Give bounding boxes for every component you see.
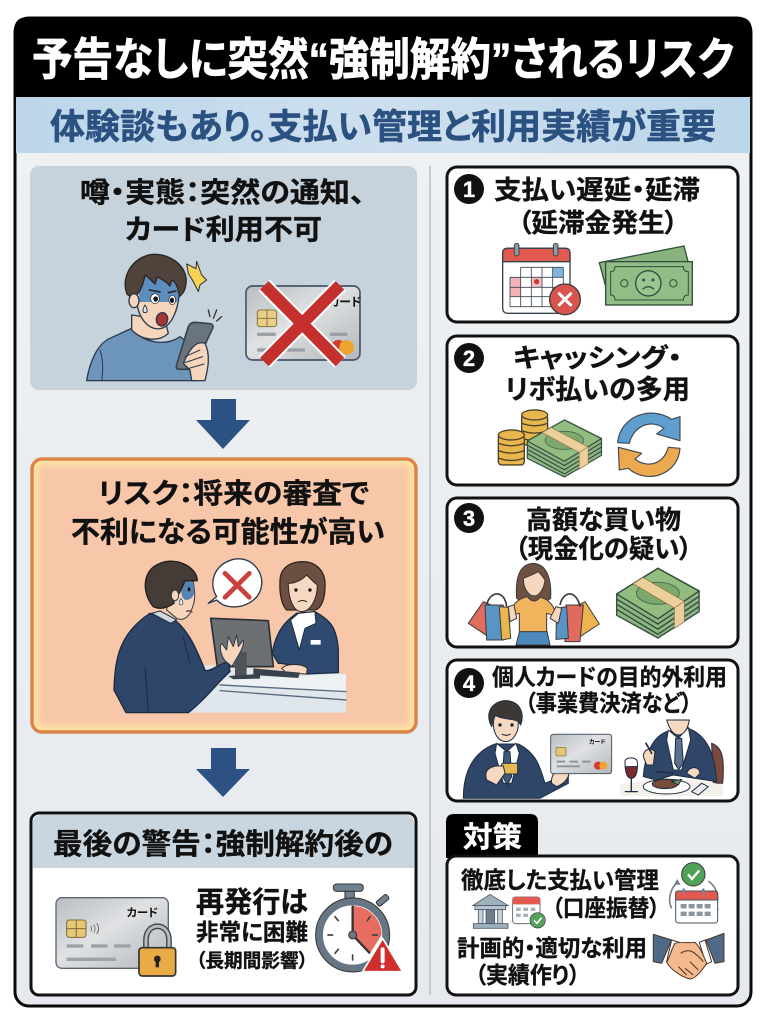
card 3: high-value purchases [447,498,738,647]
warning text: 非常に困難 [196,919,308,945]
number 4: 4 [463,671,476,696]
heading: rumours: 噂・実態：突然の通知、 [80,177,365,208]
icon: stack of cash [617,568,699,638]
icon: credit card: カード [589,739,606,746]
icon: locked card [56,898,176,976]
heading 1: 支払い遅延・延滞 [494,175,700,205]
icon: crossed-out credit card: カード [328,295,362,309]
number 3: 3 [463,506,475,531]
text: planned use [457,935,647,988]
arrow: down to risk [196,399,250,449]
icon: customer refused at bank counter [114,559,346,713]
icon: woman with shopping bags [468,563,599,645]
number 2 [454,343,484,373]
warning text [196,886,308,972]
arrow: down to warning [196,748,250,797]
panel: risk [32,459,416,732]
icon: banknotes with sad face [599,246,692,305]
subtitle banner [16,97,750,153]
heading 2 [505,343,690,405]
icon: credit card [551,734,612,774]
countermeasures tab: 対策 [463,821,522,854]
number 4 [454,668,484,698]
subtitle banner: 体験談もあり。支払い管理と利用実績が重要 [50,108,716,147]
heading 1: （延滞金発生） [518,208,678,238]
countermeasures tab [446,814,538,858]
icon: calendar with check [513,897,545,928]
icon: calendar with missed date [503,243,580,315]
column divider [429,166,431,995]
icon: stopwatch with warning [316,884,403,972]
heading: risk: 不利になる可能性が高い [71,515,385,549]
panel: final warning [31,813,416,995]
icon: handshake [653,933,724,979]
heading 4: （事業費決済など） [525,690,692,716]
warning text: （長期間影響） [196,950,308,972]
panel: rumours and reality [30,166,417,390]
icon: businessman holding card [463,701,569,798]
heading 2: キャッシング・ [513,343,682,373]
number 1: 1 [463,177,475,202]
heading 2: リボ払いの多用 [505,375,690,405]
card 2: cashing and revolving [447,336,738,485]
text: planned use: （実績作り） [475,962,580,988]
icon: shocked man with phone [87,254,222,381]
heading 4 [492,664,727,716]
heading: rumours [80,177,365,245]
card 4: business use [447,660,738,801]
icon: bank [473,894,508,928]
heading: risk: リスク：将来の審査で [98,478,369,509]
number 2: 2 [463,346,475,371]
heading 4: 個人カードの目的外利用 [492,664,727,690]
card 1: late payment [447,167,738,322]
heading 1 [494,175,700,238]
panel: countermeasures [447,856,738,995]
icon: recurring calendar check [670,863,719,923]
icon: crossed-out credit card [246,285,362,362]
icon: man dining with wine [620,720,723,796]
number 1 [454,174,484,204]
icon: coins and cash stack [498,410,601,477]
number 3 [454,503,484,533]
icon: revolving arrows [618,413,680,476]
icon: locked card: カード [126,907,158,920]
text: payment management: （口座振替） [552,895,660,921]
heading 3 [515,505,692,564]
warning text: 再発行は [196,886,308,919]
heading: risk [71,478,385,549]
heading 3: 高額な買い物 [526,505,681,535]
heading: rumours: カード利用不可 [125,214,322,245]
heading: final warning: 最後の警告：強制解約後の [53,828,393,861]
text: payment management [461,867,660,921]
heading 3: （現金化の疑い） [515,534,692,564]
text: planned use: 計画的・適切な利用 [457,935,647,961]
text: payment management: 徹底した支払い管理 [461,867,659,893]
